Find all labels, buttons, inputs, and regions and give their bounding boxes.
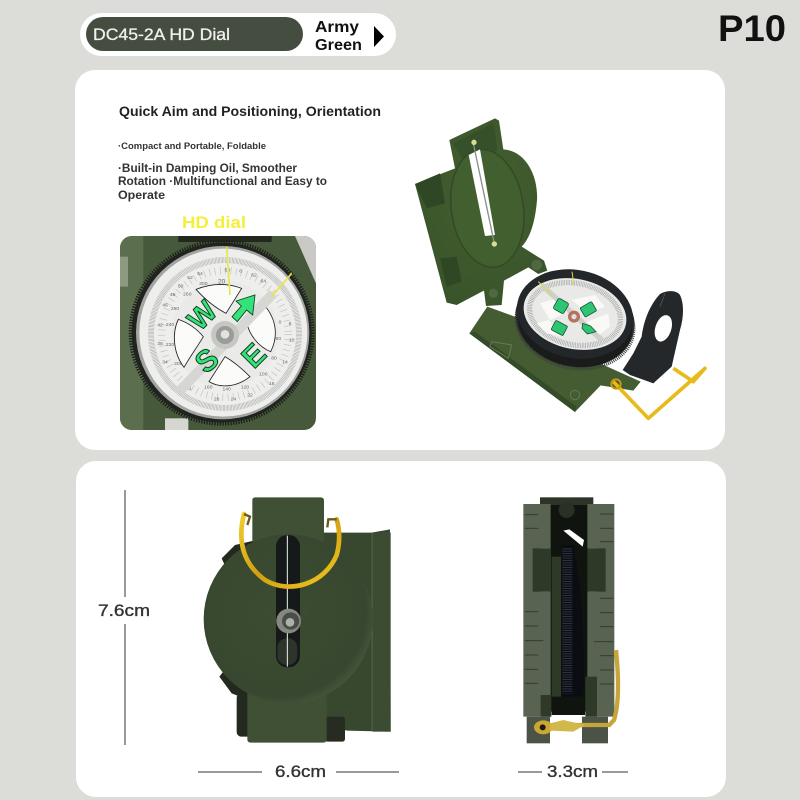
right rail [587,504,614,717]
model name badge [86,17,303,51]
dimension: depth [518,762,628,781]
text block: feature list: Operate [118,190,165,202]
window petals [174,284,275,386]
dial numbers: 34 [162,359,168,365]
gold bail [613,368,705,418]
dial numbers: 62 [251,273,257,279]
dial numbers: 80 [271,355,277,361]
sight slot [276,535,300,667]
dial numbers: 50 [178,283,184,289]
centre dial edge [550,505,588,712]
dial numbers: 140 [223,387,231,393]
bottom tab [247,693,327,743]
panel: features [75,70,725,450]
cardinal letters: E [236,337,273,375]
dial numbers: 8 [289,321,292,327]
heading: Quick Aim and Positioning, Orientation [119,103,381,119]
dial numbers: 26 [214,397,220,403]
model name badge: DC45-2A HD Dial [93,25,230,44]
lubber line [542,285,602,340]
dimension: height: 7.6cm [98,601,150,620]
bottom feet [527,717,550,743]
dial numbers: 14 [282,359,288,365]
image: HD dial close-up [119,236,316,432]
dial numbers: 30 [186,386,191,392]
dial numbers: 0 [279,319,282,325]
top tab [252,497,324,557]
dial numbers: 18 [269,381,275,387]
silver lubber band [181,293,273,390]
dial numbers: 260 [171,306,179,312]
lid slot [469,149,495,236]
gold bail [570,650,618,725]
dial window petals [537,295,610,337]
dial numbers: 58 [225,268,230,274]
panel: dimensions [76,461,726,797]
dial numbers [157,268,295,403]
dial numbers: 6 [239,269,242,275]
dial numbers: 300 [199,281,208,287]
rear sight [623,291,683,383]
yellow pointers [227,247,292,297]
disc lid [204,534,373,704]
dial numbers: 180 [186,376,194,382]
dial numbers: 20 [218,278,226,285]
image: compass side view [523,497,618,743]
colour label [315,19,362,54]
gold ring [241,514,339,587]
dial numbers: 220 [166,342,174,348]
dial numbers: 200 [174,361,183,367]
dial numbers: 48 [170,292,176,298]
dial numbers: 100 [259,372,268,378]
rail tick marks [525,514,613,684]
image: open compass [415,118,705,418]
text block: feature list: ·Built-in Damping Oil, Smoother [118,163,298,175]
dial numbers: 24 [231,397,236,403]
cardinal letters [184,298,268,372]
text block: feature list: Rotation ·Multifunctional and Easy to [118,176,327,188]
arrow [232,295,255,322]
hinge feet [237,693,253,737]
dial numbers: 64 [261,279,266,285]
dial numbers: 60 [276,336,281,342]
text block: feature list: ·Compact and Portable, Foldable [118,141,266,152]
dial numbers: 52 [187,275,193,281]
dimension: depth: 3.3cm [547,762,598,781]
dial numbers: 54 [197,271,203,277]
dial numbers: 160 [204,384,213,390]
cardinal letters: S [189,342,225,380]
cardinal letters: W [182,295,224,337]
image: compass closed front view [204,497,391,743]
lens [276,609,301,633]
luminous marks [551,298,597,336]
body side [323,529,391,732]
dial numbers: 42 [157,323,163,329]
dimension: width: 6.6cm [275,762,326,781]
left rail [523,504,551,717]
header pill [80,13,396,56]
dial numbers: 260 [183,292,192,298]
text block: feature list [118,141,327,202]
compass lid [415,118,547,306]
label: HD dial: HD dial [182,213,246,232]
colour label: Army [315,19,359,36]
dial numbers: 38 [157,341,163,347]
compass base [469,307,641,412]
dial numbers: 10 [289,338,295,344]
dial numbers: 120 [241,384,249,390]
dial numbers: 240 [166,322,174,328]
dial numbers: 22 [247,393,253,399]
icon: arrow [374,26,384,47]
compass bezel [507,262,643,378]
page code: P10 [718,8,786,49]
colour label: Green [315,37,362,54]
dial numbers: 46 [162,303,168,309]
